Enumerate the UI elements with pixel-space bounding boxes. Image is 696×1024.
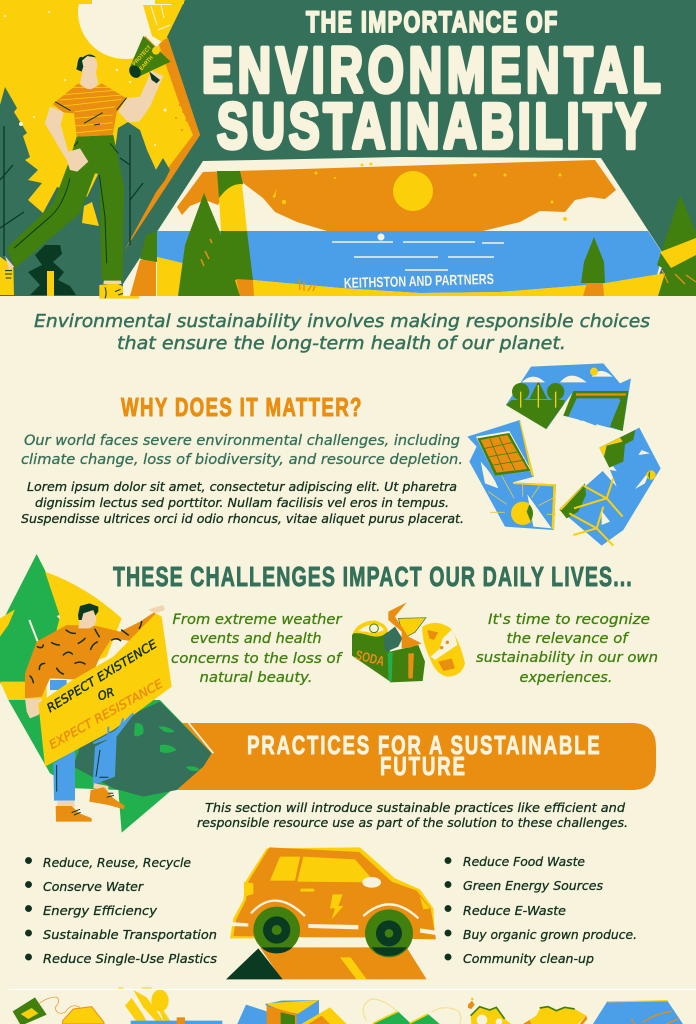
- wheels: [253, 907, 300, 953]
- vertical colour band: [217, 171, 243, 198]
- trousers: [7, 135, 124, 281]
- right large tree: [657, 195, 696, 296]
- orange sunburst edge: [124, 38, 200, 251]
- text block: practices intro: [197, 800, 628, 830]
- megaphone: EARTH: [139, 55, 155, 72]
- intro statement: Environmental sustainability involves making responsible choices: [34, 311, 650, 332]
- banner: practices heading: PRACTICES FOR A SUSTAINABLE: [247, 730, 600, 760]
- text block: practices intro: This section will introduce sustainable practices like efficient and: [205, 800, 625, 815]
- illustration: man with protest banner: [0, 554, 213, 833]
- yellow banner: [38, 613, 172, 767]
- footer icon strip left: [13, 988, 347, 1024]
- shirt: [53, 83, 127, 137]
- foreground pine tree: [178, 193, 240, 296]
- lightning bolt: [330, 894, 343, 919]
- wheel arches and trim: [251, 901, 418, 918]
- text block: challenges summary: Our world faces severe environmental challenges, including: [24, 433, 460, 449]
- hands: [25, 605, 165, 718]
- tree trunks: [0, 126, 143, 256]
- text block: challenges summary: [21, 433, 463, 468]
- right arrow: wind turbines: [559, 428, 661, 546]
- icon: tea bag: [13, 997, 47, 1024]
- list: right practices: Reduce E-Waste: [463, 903, 566, 918]
- foreground yellow shore: [157, 257, 665, 296]
- eggshell: [422, 623, 465, 677]
- heading: why does it matter: WHY DOES IT MATTER?: [121, 392, 361, 422]
- heading: these challenges: THESE CHALLENGES IMPACT OUR DAILY LIVES...: [113, 562, 632, 593]
- icon: open book: [237, 1000, 319, 1024]
- landscape frame: [123, 157, 666, 296]
- crushed can body: SODA: [354, 647, 386, 669]
- megaphone: [127, 35, 171, 83]
- text block: right impact: It's time to recognize: [488, 612, 650, 628]
- pine tree left: [0, 87, 43, 230]
- icon: recycling symbol: [467, 363, 661, 546]
- green diamond background: [0, 554, 73, 683]
- list: right practices: Community clean-up: [463, 951, 594, 966]
- right arm: [118, 71, 163, 122]
- text block: lorem ipsum: [21, 479, 464, 526]
- sun disc: [78, 0, 172, 59]
- road: [260, 947, 427, 979]
- text block: practices intro: responsible resource use as part of the solution to these challenges.: [197, 815, 628, 830]
- banner wording: RESPECT EXISTENCE: [44, 637, 160, 715]
- banner: practices heading: FUTURE: [380, 751, 465, 781]
- title: THE IMPORTANCE OF: [306, 4, 557, 39]
- speckle dots: [4, 11, 166, 146]
- list: left practices: Sustainable Transportation: [43, 927, 217, 942]
- list: right practices: Green Energy Sources: [463, 878, 603, 893]
- lake ripples: [332, 242, 504, 270]
- shoes: [57, 783, 108, 807]
- icon: blue tray: [593, 1001, 683, 1024]
- light beam: [143, 5, 174, 42]
- icon: bitten cheese: [471, 1007, 511, 1024]
- footer icon strip right: [363, 998, 683, 1024]
- text block: left impact: natural beauty.: [200, 670, 312, 686]
- front shoe: [99, 283, 139, 299]
- text block: right impact: [476, 612, 658, 686]
- yellow leaf shard: [82, 202, 99, 226]
- windows: [270, 857, 375, 882]
- intro statement: that ensure the long-term health of our planet.: [117, 333, 566, 354]
- text block: right impact: experiences.: [520, 670, 612, 686]
- sky speckles: [272, 162, 567, 221]
- title: ENVIRONMENTAL: [202, 35, 661, 106]
- icon: takeaway box: [63, 1007, 104, 1024]
- text block: challenges summary: climate change, loss of biodiversity, and resource depletion.: [21, 452, 463, 468]
- car shadow: [230, 847, 435, 939]
- lake: [157, 231, 663, 293]
- list: right practices: Buy organic grown produce.: [463, 927, 637, 942]
- company label: KEITHSTON AND PARTNERS: [344, 272, 494, 292]
- foreground orange left: [130, 258, 156, 296]
- title: [202, 4, 661, 162]
- orange sky: [177, 160, 616, 231]
- header illustration panel: [0, 0, 696, 299]
- intro statement: [34, 311, 650, 354]
- man with megaphone: [0, 35, 171, 299]
- megaphone: PROTECT: [132, 44, 153, 67]
- left arm: [45, 107, 88, 172]
- text block: right impact: the relevance of: [506, 631, 629, 647]
- reeds: [299, 279, 315, 291]
- title: SUSTAINABILITY: [217, 91, 646, 162]
- text block: left impact: [171, 612, 343, 686]
- top arrow: forest and dam: [506, 363, 631, 431]
- icon: electric car: [226, 847, 436, 979]
- back shoe: [0, 257, 14, 295]
- text block: lorem ipsum: dignissim lectus sed porttitor. Nullam facilisis vel eros in tempus.: [35, 495, 449, 510]
- neck and head: [78, 622, 90, 628]
- text block: left impact: From extreme weather: [172, 612, 343, 628]
- sweater: [25, 612, 157, 698]
- text block: lorem ipsum: Suspendisse ultrices orci id odio rhoncus, vitae aliquet purus placerat.: [21, 511, 464, 526]
- icon: bitten sandwich: [523, 1007, 586, 1024]
- right small tree: [581, 237, 605, 283]
- list: right practices: Reduce Food Waste: [463, 854, 585, 869]
- car body: [233, 847, 436, 939]
- text block: lorem ipsum: Lorem ipsum dolor sit amet, consectetur adipiscing elit. Ut pharetra: [27, 479, 457, 494]
- list: left practices: [25, 855, 217, 966]
- icon: soda can and eggshell waste: [352, 602, 465, 682]
- icon: cutlery: [125, 990, 163, 1024]
- headlight: [362, 877, 381, 888]
- banner wording: OR: [96, 685, 116, 704]
- banner wording: EXPECT RESISTANCE: [47, 676, 166, 752]
- banner wording: [44, 637, 166, 752]
- list: left practices: Conserve Water: [43, 879, 144, 894]
- text block: right impact: sustainability in our own: [476, 650, 658, 666]
- icon: shopping bags: [373, 1011, 440, 1024]
- left arrow: solar panels: [467, 420, 556, 530]
- text block: left impact: concerns to the loss of: [171, 651, 343, 667]
- ankles: [5, 256, 122, 284]
- banner: practices heading: [175, 723, 656, 790]
- legs: [50, 680, 117, 801]
- dark tree: [28, 245, 76, 295]
- yellow sky background: [0, 0, 200, 296]
- list: left practices: Reduce, Reuse, Recycle: [43, 855, 191, 870]
- forest ground: [0, 170, 168, 296]
- list: left practices: Energy Efficiency: [43, 903, 158, 918]
- list: left practices: Reduce Single-Use Plastics: [43, 951, 217, 966]
- neck and head: [80, 68, 98, 89]
- list: right practices: [445, 854, 637, 966]
- text block: left impact: events and health: [190, 631, 322, 647]
- yellow tree trunk: [47, 271, 54, 296]
- pine tree right: [112, 122, 170, 235]
